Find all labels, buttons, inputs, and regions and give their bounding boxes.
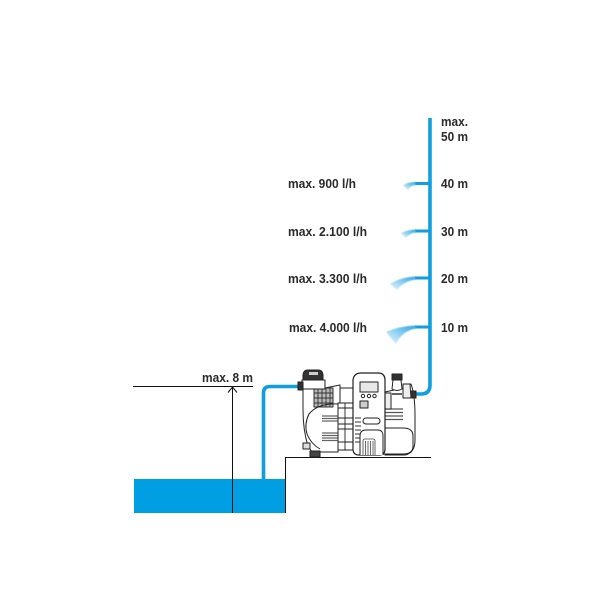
suction pipe xyxy=(264,386,299,480)
spray at 10 m xyxy=(386,326,430,344)
spray at 20 m xyxy=(390,276,430,290)
label: max. 50 m: 50 m xyxy=(441,130,468,144)
suction height line xyxy=(133,386,253,388)
label: max. 4.000 l/h: max. 4.000 l/h xyxy=(289,321,367,335)
controller column xyxy=(353,373,385,455)
pump body xyxy=(303,385,340,452)
rear body xyxy=(385,384,415,455)
suction height arrow xyxy=(228,387,237,513)
filter cap xyxy=(303,370,323,380)
label: 20 m: 20 m xyxy=(441,272,468,286)
upper coupling xyxy=(340,388,353,403)
icon: garden pump xyxy=(298,370,416,457)
centre coupling xyxy=(338,403,356,450)
spray at 30 m xyxy=(401,230,430,238)
drain outlet xyxy=(310,451,320,457)
side clamp xyxy=(385,393,391,409)
label: 10 m: 10 m xyxy=(441,321,468,335)
motor housing xyxy=(383,428,413,454)
brand mark xyxy=(392,393,402,395)
filter collar xyxy=(302,380,325,389)
outlet collar xyxy=(403,384,411,398)
label: max. 50 m xyxy=(441,115,468,144)
base foot xyxy=(360,430,383,455)
outlet connector xyxy=(411,391,416,398)
ground outline xyxy=(286,458,431,513)
delivery pipe xyxy=(414,118,430,394)
volute curve xyxy=(306,404,338,449)
suction connector xyxy=(298,382,303,390)
display buttons xyxy=(361,394,376,398)
outlet neck xyxy=(392,380,402,390)
label: 30 m: 30 m xyxy=(441,225,468,239)
label: max. 3.300 l/h: max. 3.300 l/h xyxy=(288,272,367,286)
handle slot xyxy=(363,418,380,424)
display xyxy=(360,382,378,392)
label: max. 900 l/h: max. 900 l/h xyxy=(288,177,356,191)
motor fins xyxy=(322,416,338,440)
label: max. 2.100 l/h: max. 2.100 l/h xyxy=(288,225,367,239)
spray at 40 m xyxy=(403,182,430,190)
label: max. 50 m: max. xyxy=(441,115,468,129)
outlet cap xyxy=(392,374,402,380)
drain plug xyxy=(303,443,310,449)
base grille xyxy=(363,439,375,455)
label: 40 m: 40 m xyxy=(441,177,468,191)
rear body vent stripes xyxy=(385,409,403,420)
filter bowl fins xyxy=(314,388,333,407)
water reservoir xyxy=(134,479,285,513)
button pad xyxy=(360,401,368,408)
label: max. 8 m: max. 8 m xyxy=(202,371,253,385)
side vents xyxy=(355,418,361,442)
